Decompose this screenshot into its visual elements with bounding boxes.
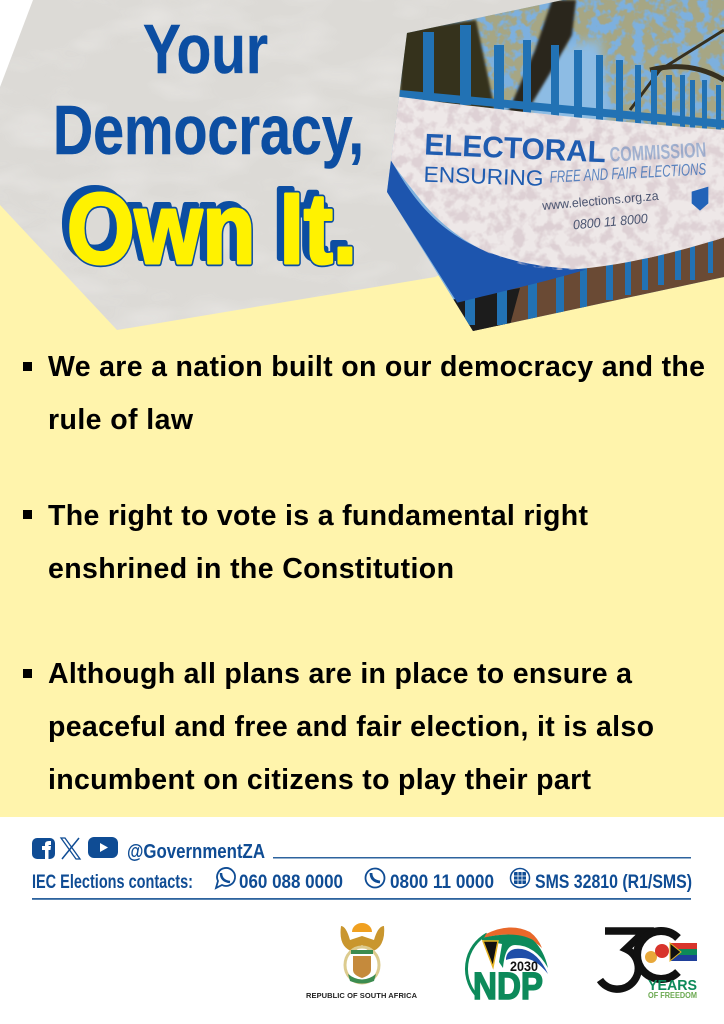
bullet 3 [23, 658, 654, 796]
logo: coat of arms [306, 923, 418, 1000]
sun [352, 923, 372, 932]
title line: Own It.: Own It. [67, 173, 357, 285]
icon: X [61, 838, 80, 859]
banner: www.elections.org.za [541, 189, 660, 213]
bullet 1: We are a nation built on our democracy and the [48, 351, 705, 383]
NDP: NDP [473, 966, 543, 1008]
photo: electoral commission banner on fence [380, 0, 724, 340]
icon: facebook [32, 838, 55, 859]
of freedom: OF FREEDOM [648, 991, 697, 1000]
years: YEARS [648, 977, 697, 994]
coat of arms caption: REPUBLIC OF SOUTH AFRICA [306, 991, 418, 1000]
bullet 2: The right to vote is a fundamental right [48, 500, 588, 532]
yellow content panel [0, 200, 724, 817]
banner [380, 90, 724, 303]
banner: 0800 11 8000 [572, 211, 649, 232]
social handle: @GovernmentZA [127, 841, 265, 863]
icon: whatsapp [216, 868, 235, 888]
people figures [645, 951, 657, 963]
title [53, 10, 364, 285]
bullet 2: enshrined in the Constitution [48, 553, 454, 585]
2030: 2030 [510, 959, 538, 974]
icon: phone [366, 868, 384, 888]
sky and foliage [380, 0, 724, 340]
title line: Democracy,: Democracy, [53, 91, 364, 169]
bullet 3: peaceful and free and fair election, it is also [48, 711, 654, 743]
icon: youtube [88, 837, 118, 858]
whatsapp number: 060 088 0000 [239, 872, 343, 893]
bullet 3: Although all plans are in place to ensure a [48, 658, 633, 690]
title line: Own It.: Own It. [67, 173, 357, 285]
banner text: ENSURING [423, 162, 544, 191]
flag [670, 943, 697, 961]
banner text: ELECTORAL [424, 128, 607, 169]
bullet 3: incumbent on citizens to play their part [48, 764, 592, 796]
title line: Own It.: Own It. [61, 168, 351, 280]
icon: sms keypad [510, 868, 530, 888]
concrete header shape [0, 0, 600, 335]
footer: contacts [32, 837, 692, 900]
fence posts [400, 25, 724, 325]
contacts label: IEC Elections contacts: [32, 872, 193, 893]
bullet 1: rule of law [48, 404, 194, 436]
logo: 30 years of freedom [600, 931, 697, 1000]
IEC emblem [692, 187, 708, 211]
ground below banner [468, 238, 724, 331]
title line: Your: Your [143, 10, 268, 88]
bullet list [23, 351, 705, 796]
bullet 2 [23, 500, 588, 585]
numeral 0 [637, 931, 678, 979]
sms text: SMS 32810 (R1/SMS) [535, 872, 692, 893]
logo: NDP 2030 [466, 927, 548, 1008]
bullet 1 [23, 351, 705, 436]
phone number: 0800 11 0000 [390, 872, 494, 893]
banner text [423, 128, 707, 191]
numeral 3 [600, 931, 645, 989]
